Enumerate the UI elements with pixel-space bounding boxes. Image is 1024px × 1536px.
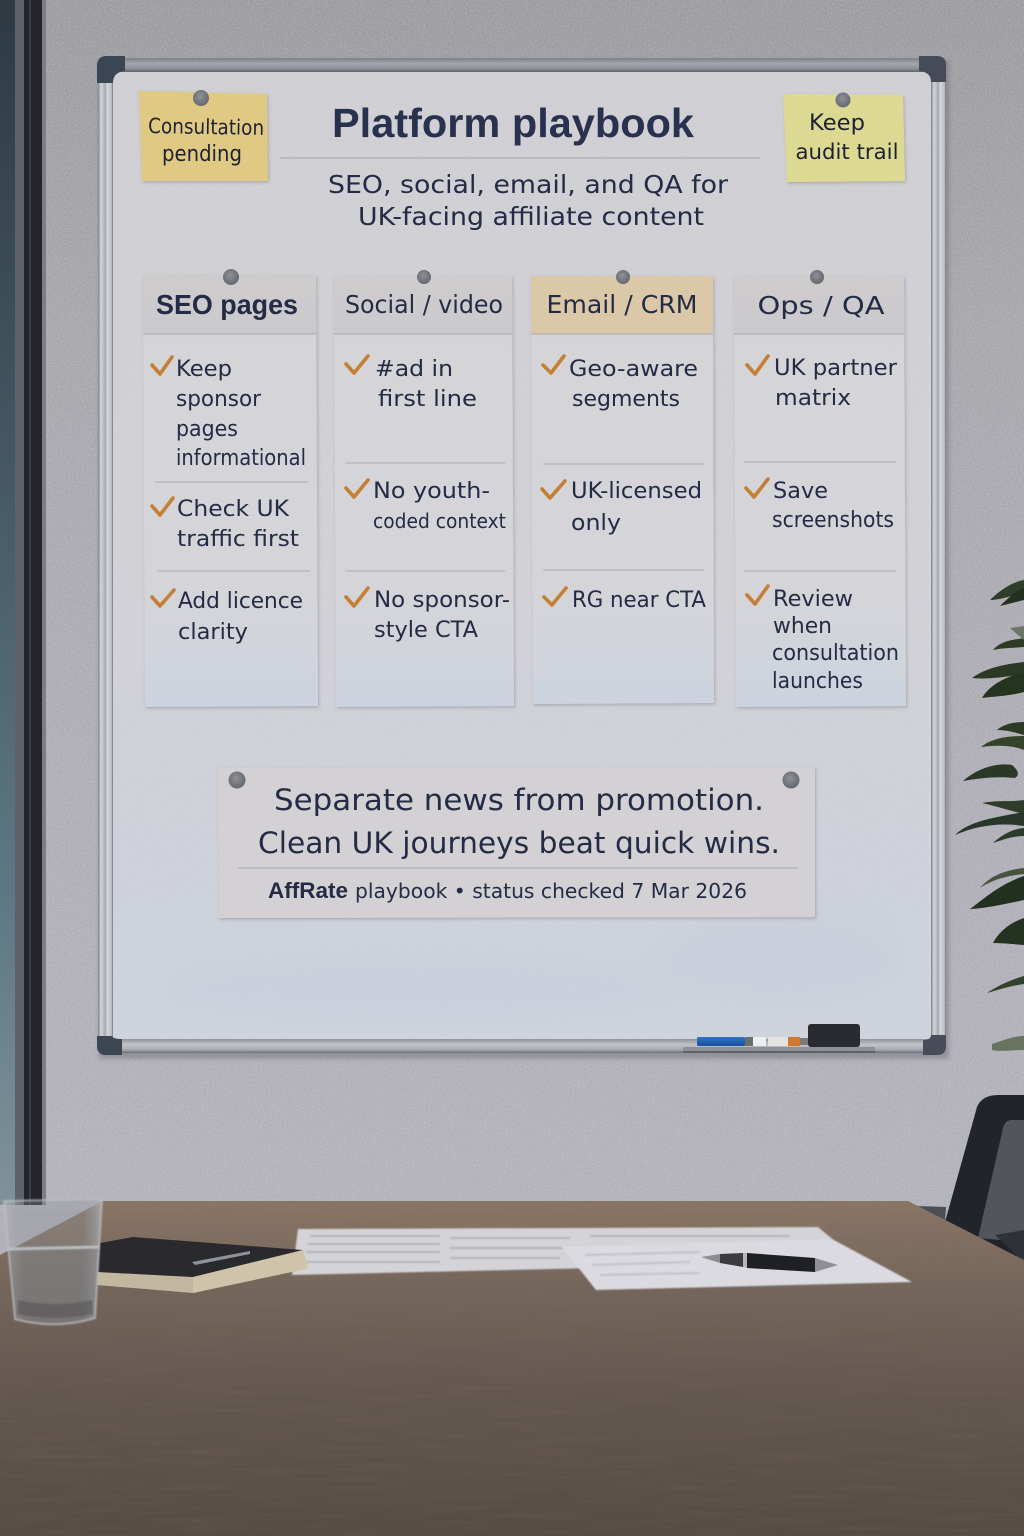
banner footer: playbook • status checked 7 Mar 2026 bbox=[355, 879, 747, 903]
item: geo-aware segments bbox=[543, 356, 698, 412]
item: add licence clarity: clarity bbox=[178, 620, 248, 645]
panel header: Social / video bbox=[334, 270, 512, 334]
board frame left bbox=[98, 66, 113, 1046]
paper documents on table bbox=[292, 1227, 912, 1290]
item: UK partner matrix bbox=[747, 356, 898, 411]
panel header: SEO pages bbox=[143, 269, 316, 334]
banner: key message: Clean UK journeys beat quick wins. bbox=[258, 826, 780, 860]
board surface bbox=[108, 68, 934, 1044]
item: check UK traffic first bbox=[152, 497, 299, 552]
window frame at left bbox=[0, 0, 46, 1205]
item: #ad in first line bbox=[346, 356, 477, 412]
item: keep sponsor pages informational bbox=[152, 357, 306, 471]
marker tray with markers and eraser bbox=[683, 1024, 875, 1053]
item: keep sponsor pages informational: sponsor bbox=[176, 387, 262, 412]
item: RG near CTA: RG near CTA bbox=[572, 588, 706, 613]
item: UK partner matrix: UK partner bbox=[774, 356, 898, 381]
panel header: Email / CRM: Email / CRM bbox=[546, 290, 698, 319]
panel header: Ops / QA: Ops / QA bbox=[758, 291, 884, 320]
item: UK-licensed only: only bbox=[571, 511, 621, 536]
board frame top bbox=[112, 58, 932, 72]
panel: Social / video bbox=[334, 270, 514, 707]
panel header: Email / CRM bbox=[531, 270, 713, 334]
plant at right bbox=[955, 580, 1024, 1051]
sticky note: consultation pending: Consultation bbox=[148, 114, 264, 140]
sticky note: keep audit trail bbox=[783, 92, 905, 182]
item: no sponsor-style CTA: No sponsor- bbox=[374, 588, 510, 613]
item: check UK traffic first: traffic first bbox=[177, 527, 299, 552]
sticky note: keep audit trail: audit trail bbox=[796, 140, 898, 164]
corner bottom right bbox=[923, 1035, 946, 1055]
subtitle: UK-facing affiliate content bbox=[358, 202, 704, 231]
banner: key message bbox=[218, 767, 815, 918]
item: UK partner matrix: matrix bbox=[775, 386, 851, 411]
item: no sponsor-style CTA bbox=[346, 588, 510, 643]
board frame right bbox=[931, 66, 946, 1046]
item: #ad in first line: #ad in bbox=[375, 357, 453, 382]
item: review when consultation launches: launches bbox=[772, 669, 863, 694]
banner: key message: Separate news from promotion. bbox=[274, 783, 764, 817]
board frame bottom bbox=[112, 1039, 932, 1053]
sticky note: keep audit trail: Keep bbox=[809, 111, 865, 136]
item: add licence clarity: Add licence bbox=[178, 589, 303, 614]
item: save screenshots: Save bbox=[773, 479, 828, 504]
panel: Ops / QA bbox=[734, 270, 906, 707]
chair at right bbox=[916, 1095, 1024, 1262]
panel header: Social / video: Social / video bbox=[345, 290, 503, 319]
subtitle bbox=[328, 170, 729, 231]
item: keep sponsor pages informational: informational bbox=[176, 446, 306, 471]
item: geo-aware segments: segments bbox=[572, 387, 680, 412]
item: UK-licensed only: UK-licensed bbox=[571, 479, 702, 504]
item: save screenshots bbox=[746, 479, 894, 533]
table bbox=[0, 1201, 1024, 1536]
corner top left bbox=[97, 56, 125, 83]
corner top right bbox=[919, 56, 946, 82]
whiteboard bbox=[97, 56, 949, 1059]
item: no youth-coded context bbox=[346, 479, 506, 533]
pen on papers bbox=[701, 1253, 838, 1272]
item: UK-licensed only bbox=[542, 479, 702, 536]
sticky note: consultation pending: pending bbox=[162, 142, 242, 167]
item: #ad in first line: first line bbox=[378, 387, 477, 412]
item: geo-aware segments: Geo-aware bbox=[569, 357, 698, 382]
panel: SEO pages bbox=[143, 269, 318, 707]
item: no sponsor-style CTA: style CTA bbox=[374, 618, 478, 643]
notebook and pen bbox=[97, 1237, 308, 1293]
panel: Email / CRM bbox=[531, 270, 714, 704]
item: review when consultation launches: consultation bbox=[772, 641, 899, 666]
item: review when consultation launches: Review bbox=[773, 587, 853, 612]
title: Platform playbook bbox=[332, 100, 694, 146]
subtitle: SEO, social, email, and QA for bbox=[328, 170, 729, 199]
sticky note: consultation pending bbox=[139, 90, 268, 181]
item: review when consultation launches bbox=[747, 586, 899, 694]
item: review when consultation launches: when bbox=[773, 614, 832, 639]
panel header: Ops / QA bbox=[734, 270, 904, 334]
item: check UK traffic first: Check UK bbox=[177, 497, 290, 522]
title divider bbox=[280, 157, 760, 159]
item: keep sponsor pages informational: Keep bbox=[176, 357, 232, 382]
item: add licence clarity bbox=[152, 589, 303, 645]
item: no youth-coded context: No youth- bbox=[373, 479, 490, 504]
item: keep sponsor pages informational: pages bbox=[176, 417, 238, 442]
item: save screenshots: screenshots bbox=[772, 508, 894, 533]
glass of water bbox=[4, 1199, 102, 1324]
corner bottom left bbox=[97, 1036, 122, 1055]
panel header: SEO pages: SEO pages bbox=[156, 289, 298, 320]
item: no youth-coded context: coded context bbox=[373, 509, 506, 533]
banner footer: AffRate bbox=[268, 878, 348, 903]
